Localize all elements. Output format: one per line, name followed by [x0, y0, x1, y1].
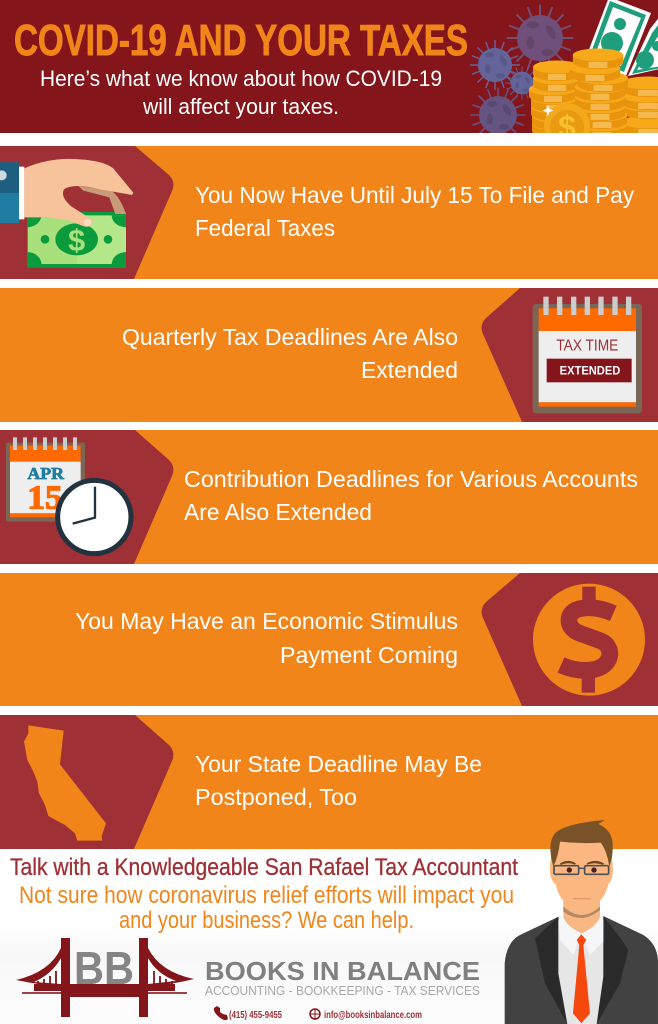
icon: hand holding banknote — [0, 159, 133, 267]
text: company services: ACCOUNTING - BOOKKEEPING - TAX SERVICES — [205, 983, 480, 998]
contact: email — [310, 1009, 422, 1021]
contact: phone: (415) 455-9455 — [229, 1010, 282, 1021]
icon: tax time calendar — [533, 297, 642, 413]
icon panel shape — [0, 715, 173, 849]
panel: footer background — [0, 925, 658, 1024]
logo: Books in Balance bridge — [16, 938, 194, 1017]
icon: accountant portrait — [505, 820, 658, 1024]
subtitle: Here’s what we know about how COVID-19 — [40, 66, 442, 91]
icon: April 15 calendar and clock: 15 — [27, 479, 63, 516]
panel: stimulus payment — [0, 573, 658, 706]
icon: tax time calendar: EXTENDED — [560, 363, 621, 377]
text: You May Have an Economic Stimulus — [75, 608, 458, 634]
text — [195, 182, 634, 241]
panel: state deadline — [0, 715, 658, 849]
text: company name: BOOKS IN BALANCE — [205, 956, 480, 986]
icon: April 15 calendar and clock: APR — [27, 464, 65, 483]
text — [75, 608, 458, 668]
icon panel shape — [482, 573, 658, 706]
logo: Books in Balance bridge: BB — [74, 942, 134, 994]
text: Payment Coming — [280, 642, 458, 668]
icon: hand holding banknote: $ — [68, 223, 85, 257]
panel: July 15 deadline — [0, 146, 658, 279]
text: Quarterly Tax Deadlines Are Also — [122, 324, 458, 350]
panel: contribution deadlines — [0, 430, 658, 564]
icon panel shape — [482, 288, 658, 422]
icon: viruses, coins and banknotes: $ — [558, 109, 576, 145]
subtitle — [40, 66, 442, 119]
text — [195, 751, 482, 810]
subtitle: will affect your taxes. — [142, 94, 339, 119]
contact: phone — [214, 1006, 282, 1021]
icon: dollar coin — [533, 584, 645, 696]
text: call to action body: and your business? We can help. — [119, 907, 414, 934]
icon panel shape — [0, 430, 173, 564]
panel: quarterly deadlines — [0, 288, 658, 422]
text: You Now Have Until July 15 To File and Pay — [195, 182, 634, 208]
text: Postponed, Too — [195, 784, 357, 810]
text: call to action body: Not sure how coronavirus relief efforts will impact you — [19, 882, 514, 909]
icon: April 15 calendar and clock — [6, 437, 131, 554]
text: call to action body — [19, 882, 514, 934]
icon panel shape — [0, 146, 173, 279]
icon: viruses, coins and banknotes — [470, 0, 658, 133]
contact: email: info@booksinbalance.com — [324, 1010, 422, 1021]
text — [122, 324, 458, 383]
icon: tax time calendar: TAX TIME — [556, 338, 618, 355]
text: Extended — [361, 357, 458, 383]
text: Federal Taxes — [195, 215, 335, 241]
panel: header banner — [0, 0, 658, 133]
icon: California outline — [24, 725, 106, 841]
text: Are Also Extended — [184, 499, 372, 525]
text — [184, 466, 638, 525]
title: COVID-19 AND YOUR TAXES — [14, 16, 468, 65]
text: Contribution Deadlines for Various Accounts — [184, 466, 638, 492]
heading: call to action: Talk with a Knowledgeable San Rafael Tax Accountant — [10, 854, 518, 881]
text: Your State Deadline May Be — [195, 751, 482, 777]
